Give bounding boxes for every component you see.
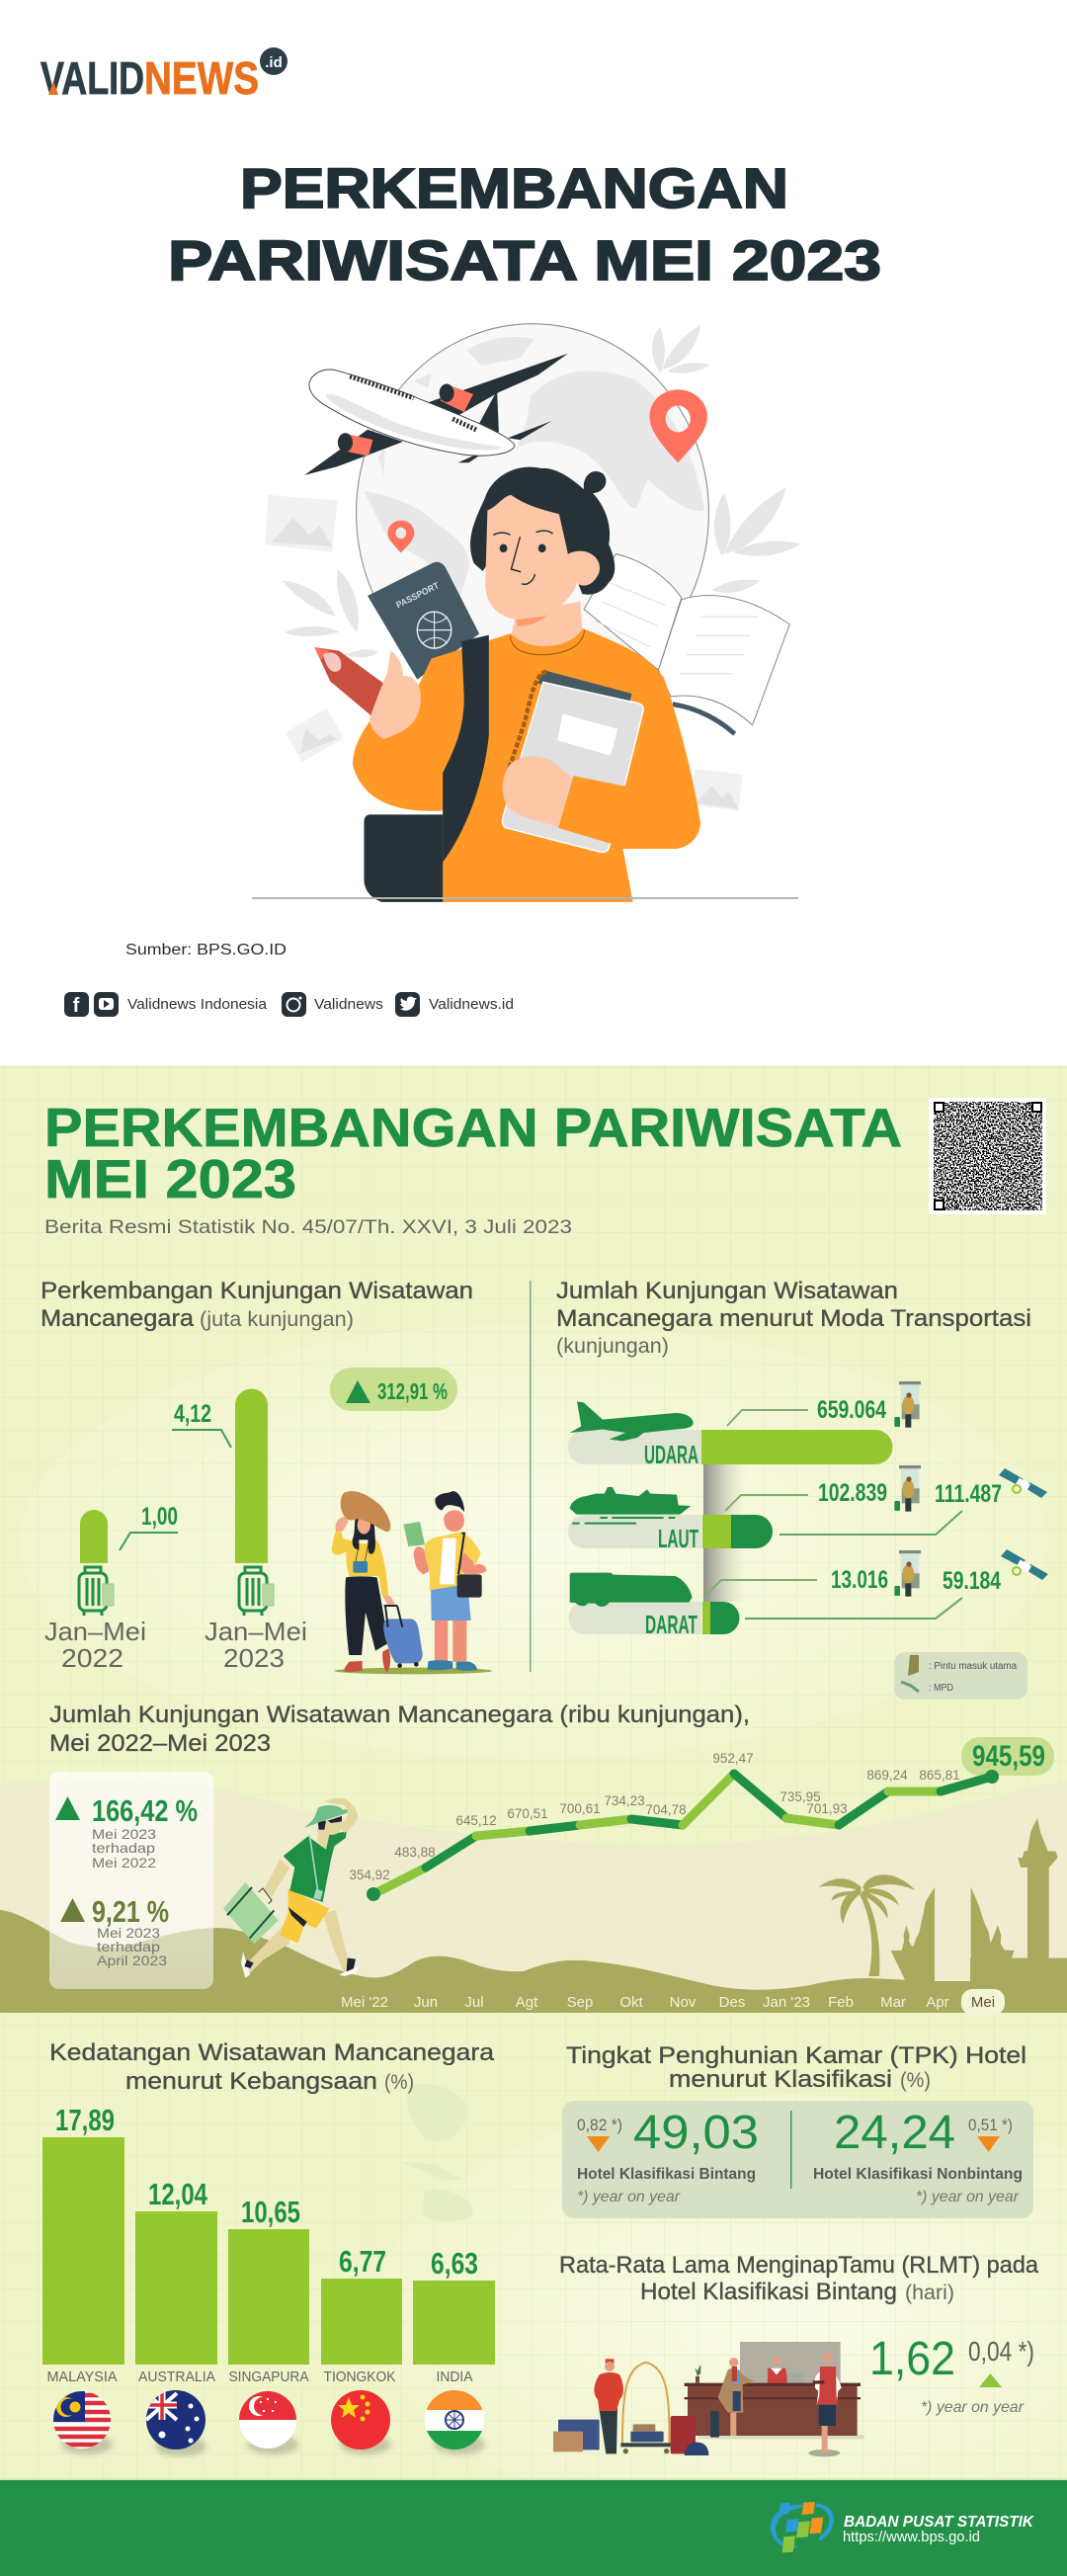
- month axis pill: [961, 1989, 1005, 2015]
- heading: Mei 2022–Mei 2023: [49, 1730, 271, 1757]
- bar values: [55, 2103, 478, 2281]
- legend: : Pintu masuk utama: [929, 1661, 1017, 1672]
- person body in orange shirt: [353, 628, 700, 902]
- label: UDARA: [644, 1440, 698, 1469]
- heading: (juta kunjungan): [200, 1308, 354, 1331]
- logo: Validnews: [41, 47, 287, 104]
- icon: satellite: [1001, 1549, 1048, 1580]
- hiker shorts: [280, 1889, 329, 1944]
- country names: SINGAPURA: [229, 2368, 308, 2385]
- label: Jan-Mei 2023: 2023: [223, 1643, 285, 1673]
- star hotels value: 49,03: [633, 2107, 759, 2159]
- woman: [332, 1491, 395, 1673]
- BPS logo: [771, 2502, 834, 2552]
- icon: faint picture frames: [265, 495, 743, 810]
- data labels: 952,47: [712, 1751, 754, 1766]
- flag: Singapore: [239, 2391, 296, 2449]
- infographic title: PERKEMBANGAN PARIWISATA: [44, 1097, 902, 1158]
- bellboy: [594, 2359, 623, 2453]
- month axis labels: Apr: [926, 1994, 949, 2011]
- bar values: 12,04: [148, 2177, 208, 2211]
- heading: (hari): [905, 2282, 954, 2304]
- icon: backpack: [364, 814, 446, 902]
- hiker suitcase: [223, 1882, 279, 1944]
- footer band: [0, 2478, 1067, 2576]
- heading: [49, 2039, 495, 2095]
- non-star hotels value: *) year on year: [916, 2189, 1020, 2205]
- country names: [47, 2368, 472, 2385]
- heading: (kunjungan): [556, 1335, 669, 1358]
- stat: month on month: Mei 2023: [97, 1925, 160, 1941]
- star hotels value: *) year on year: [577, 2189, 681, 2205]
- person shirt collar: [510, 630, 585, 655]
- country names: TIONGKOK: [324, 2368, 395, 2385]
- month axis labels: Mei '22: [341, 1994, 388, 2011]
- non-star hotels value: 0,51 *): [968, 2116, 1013, 2134]
- heading: [49, 1702, 750, 1757]
- stat: year on year: Mei 2022: [92, 1855, 156, 1870]
- agency name: BADAN PUSAT STATISTIK: [844, 2514, 1035, 2531]
- logo: Validnews: VALID: [41, 52, 144, 104]
- icon: globe: [357, 324, 708, 702]
- icon: ship silhouette: [570, 1487, 691, 1525]
- month axis labels: Mei: [971, 1994, 995, 2011]
- label pill: [567, 1430, 701, 1464]
- non-star hotels value: 24,24: [834, 2107, 955, 2159]
- desk: [685, 2365, 861, 2436]
- icon: suitcase 2023: [239, 1567, 274, 1616]
- bar shadow: [703, 1464, 749, 1602]
- bar values: 17,89: [55, 2103, 115, 2137]
- stat: year on year: [55, 1793, 198, 1870]
- star hotels value: 0,82 *): [577, 2116, 622, 2134]
- icon: youtube: [94, 992, 119, 1017]
- icon: small map pin: [388, 521, 414, 552]
- icon: pencil: [314, 647, 383, 715]
- data labels: 645,12: [455, 1813, 497, 1828]
- footnote: *) year on year: [921, 2399, 1025, 2416]
- section: white cover background: [0, 0, 1067, 1065]
- value main entry: 659.064: [817, 1396, 886, 1424]
- bar main entry: [702, 1515, 731, 1548]
- non-star hotels value: [813, 2107, 1023, 2205]
- heading: (%): [384, 2071, 414, 2094]
- icon: passport: PASSPORT: [394, 580, 441, 611]
- hiker head and hat: [318, 1820, 343, 1850]
- value MPD: 59.184: [943, 1567, 1001, 1595]
- data labels: 734,23: [604, 1793, 645, 1808]
- month axis labels: Nov: [670, 1994, 697, 2011]
- flag: India: [425, 2390, 484, 2450]
- heading: Mancanegara menurut Moda Transportasi: [556, 1305, 1031, 1332]
- value MPD: 111.487: [935, 1480, 1002, 1508]
- QR code: [929, 1098, 1046, 1214]
- subtitle: Berita Resmi Statistik No. 45/07/Th. XXVI, 3 Juli 2023: [44, 1216, 572, 1238]
- cover title: PARIWISATA MEI 2023: [168, 229, 881, 292]
- icon: facebook: f: [73, 995, 80, 1017]
- bar values: 10,65: [241, 2195, 300, 2229]
- icon: airplane: [304, 354, 568, 475]
- illustration: hotel reception: [553, 2342, 864, 2456]
- stats box: [49, 1772, 213, 1989]
- background hill: olive ground: [0, 1910, 1067, 2013]
- legend: : MPD: [929, 1683, 953, 1694]
- heading: (%): [900, 2069, 931, 2092]
- social media row: [64, 992, 514, 1017]
- value 1,00: [120, 1503, 178, 1550]
- reception shadow: [698, 2435, 864, 2439]
- country names: AUSTRALIA: [138, 2368, 215, 2385]
- heading: menurut Klasifikasi: [669, 2066, 892, 2093]
- month axis labels: Feb: [828, 1994, 854, 2011]
- month axis labels: Jun: [414, 1994, 438, 2011]
- data labels: 704,78: [645, 1802, 687, 1817]
- cover title: [168, 157, 881, 292]
- value 1,00: 1,00: [141, 1503, 178, 1531]
- bar 2022: [80, 1510, 108, 1563]
- vertical divider: [530, 1281, 532, 1672]
- logo: Validnews: .id: [265, 54, 283, 71]
- background hill: beige: [0, 1781, 1067, 2013]
- month axis labels: Mar: [880, 1994, 906, 2011]
- heading: [559, 2252, 1039, 2305]
- data labels: 354,92: [349, 1868, 390, 1882]
- panel: monthly visitors line chart: [0, 1702, 1067, 2015]
- occupancy card: [562, 2101, 1033, 2218]
- heading: Rata-Rata Lama MenginapTamu (RLMT) pada: [559, 2252, 1039, 2279]
- data labels: 670,51: [507, 1806, 548, 1821]
- label: Jan-Mei 2022: 2022: [61, 1643, 123, 1673]
- faint world map: [401, 2084, 473, 2222]
- icon: entry gate: [894, 1465, 921, 1512]
- icon: backpack strap: [443, 635, 489, 862]
- bars: [42, 2137, 495, 2365]
- month axis labels: [341, 1994, 995, 2011]
- heading: Hotel Klasifikasi Bintang: [640, 2279, 897, 2305]
- panel: hotel room occupancy: [562, 2042, 1033, 2218]
- heading: [41, 1278, 473, 1332]
- icon: notebook: [503, 670, 643, 852]
- icon: instagram: [282, 992, 306, 1017]
- label: Jan-Mei 2023: Jan–Mei: [205, 1617, 307, 1646]
- data labels: 865,81: [919, 1768, 960, 1783]
- icon: entry gate: [894, 1550, 921, 1597]
- logo: Validnews: NEWS: [144, 52, 259, 104]
- silhouette: left gate: [891, 1887, 935, 1981]
- panel: foreign visitor development: [41, 1278, 492, 1674]
- value main entry: 102.839: [818, 1479, 887, 1507]
- infographic title: MEI 2023: [44, 1148, 296, 1209]
- bar 2023: [235, 1389, 268, 1563]
- silhouette: palm tree: [818, 1874, 916, 1976]
- heading: [556, 1278, 1031, 1358]
- heading: Jumlah Kunjungan Wisatawan Mancanegara (ribu kunjungan),: [49, 1702, 750, 1728]
- person head with hair: [470, 467, 615, 646]
- suitcase: [383, 1606, 423, 1668]
- month axis labels: Jan '23: [763, 1994, 810, 2011]
- flag shadows: [61, 2435, 485, 2456]
- country names: INDIA: [437, 2368, 472, 2385]
- data labels: 869,24: [866, 1768, 908, 1783]
- section: green infographic background: [0, 1065, 1067, 2530]
- flag: Australia: [146, 2390, 205, 2450]
- hiker back arm: [264, 1860, 289, 1897]
- value MPD: [780, 1480, 1002, 1535]
- stat: year on year: terhadap: [92, 1840, 155, 1856]
- stat: year on year: Mei 2023: [92, 1826, 156, 1842]
- highlighted value 945,59: [961, 1737, 1054, 1776]
- handle: Validnews.id: Validnews.id: [429, 997, 514, 1013]
- receptionist: [768, 2357, 803, 2384]
- stat: month on month: [60, 1894, 169, 1968]
- month axis labels: Agt: [516, 1994, 538, 2011]
- bar: [701, 1430, 893, 1464]
- heading: menurut Kebangsaan: [125, 2068, 377, 2095]
- country names: MALAYSIA: [47, 2368, 117, 2385]
- luggage cart: [620, 2363, 671, 2453]
- ground line: [252, 897, 798, 899]
- man: [403, 1491, 486, 1671]
- label pill: [569, 1602, 701, 1634]
- handle: Validnews Indonesia: Validnews Indonesia: [127, 997, 268, 1013]
- illustration: two tourists with luggage: [332, 1491, 492, 1674]
- heading: [566, 2042, 1026, 2093]
- stat: month on month: terhadap: [97, 1939, 160, 1954]
- icon: leaves: [283, 324, 800, 657]
- star hotels value: [577, 2107, 759, 2205]
- heading: Jumlah Kunjungan Wisatawan: [556, 1278, 898, 1304]
- bar values: 6,77: [339, 2244, 386, 2279]
- cover title: PERKEMBANGAN: [240, 157, 788, 220]
- bar MPD: [710, 1602, 739, 1634]
- person hand thumbs up: [369, 651, 421, 739]
- stat: month on month: 9,21 %: [92, 1894, 169, 1929]
- data labels: [349, 1751, 960, 1882]
- icon: twitter: [395, 992, 420, 1017]
- icon: satellite: [999, 1468, 1047, 1498]
- percent change badge: [330, 1368, 457, 1411]
- row: land transport: [569, 1549, 1048, 1639]
- non-star hotels value: Hotel Klasifikasi Nonbintang: [813, 2166, 1023, 2183]
- value main entry: [704, 1566, 888, 1597]
- icon: bus silhouette: [570, 1573, 693, 1607]
- bar MPD: [731, 1515, 773, 1548]
- month axis labels: Sep: [567, 1994, 593, 2011]
- source text: Sumber: BPS.GO.ID: [125, 942, 287, 958]
- label: Jan-Mei 2023: [205, 1617, 307, 1673]
- receptionist standing: [808, 2353, 842, 2456]
- icon: passport: [368, 562, 479, 680]
- heading: Mancanegara: [41, 1305, 195, 1332]
- flag: China: [331, 2390, 390, 2450]
- percent change badge: 312,91 %: [377, 1378, 448, 1404]
- bar values: 6,63: [431, 2246, 478, 2281]
- star hotels value: Hotel Klasifikasi Bintang: [577, 2166, 756, 2183]
- illustration: hiker with suitcase: [223, 1798, 359, 1978]
- label: Jan-Mei 2022: Jan–Mei: [44, 1617, 146, 1646]
- silhouette: landmarks: [818, 1818, 1067, 2013]
- panel: arrivals by nationality: [42, 2039, 495, 2456]
- stat: month on month: April 2023: [97, 1953, 167, 1968]
- silhouette: right gate and national monument: [948, 1818, 1067, 2013]
- heading: Perkembangan Kunjungan Wisatawan: [41, 1278, 473, 1304]
- label pill: [568, 1515, 701, 1548]
- icon: open book: [584, 554, 789, 734]
- hiker legs: [244, 1910, 351, 1973]
- key rack: [740, 2342, 841, 2384]
- data labels: 701,93: [806, 1801, 848, 1816]
- value main entry: 13.016: [831, 1566, 888, 1594]
- value main entry: [725, 1479, 887, 1511]
- hiker shirt: [284, 1831, 347, 1902]
- infographic title: [44, 1097, 902, 1209]
- line chart: [367, 1770, 999, 1901]
- agency website: https://www.bps.go.id: [843, 2529, 980, 2545]
- icon: entry gate: [894, 1381, 921, 1428]
- label: LAUT: [658, 1524, 698, 1553]
- illustration: traveller with passport, plane and globe: [265, 324, 800, 902]
- suitcases: [553, 2416, 708, 2455]
- panel: transport mode: [556, 1278, 1048, 1700]
- change 0,04: [968, 2336, 1034, 2387]
- icon: airplane silhouette: [570, 1401, 694, 1441]
- value 1,62: 1,62: [869, 2333, 955, 2385]
- value main entry: [727, 1396, 886, 1426]
- label: Jan-Mei 2022: [44, 1617, 146, 1673]
- stat: year on year: 166,42 %: [92, 1793, 198, 1828]
- handle: Validnews: Validnews: [314, 997, 383, 1013]
- data labels: 483,88: [394, 1845, 436, 1860]
- guest: [710, 2358, 754, 2438]
- month axis labels: Jul: [464, 1994, 484, 2011]
- heading: Tingkat Penghunian Kamar (TPK) Hotel: [566, 2042, 1026, 2069]
- highlighted value 945,59: 945,59: [972, 1740, 1045, 1773]
- panel: average length of stay: [553, 2252, 1039, 2456]
- label: DARAT: [645, 1610, 698, 1639]
- icon: large map pin: [649, 389, 707, 462]
- heading: Kedatangan Wisatawan Mancanegara: [49, 2039, 495, 2066]
- person holding arm: [503, 756, 700, 849]
- row: air transport: [567, 1381, 921, 1469]
- value MPD: [745, 1567, 1001, 1619]
- month axis labels: Des: [719, 1994, 745, 2011]
- data labels: 700,61: [559, 1801, 601, 1816]
- row: sea transport: [568, 1465, 1047, 1553]
- bar main entry: [702, 1602, 710, 1634]
- flag: Malaysia: [53, 2391, 111, 2449]
- icon: suitcase 2022: [79, 1567, 114, 1616]
- change 0,04: 0,04 *): [968, 2336, 1034, 2367]
- value 4,12: [172, 1400, 231, 1448]
- value 4,12: 4,12: [174, 1400, 211, 1428]
- month axis labels: Okt: [619, 1994, 643, 2011]
- data labels: 735,95: [780, 1789, 821, 1804]
- icon: facebook: [64, 992, 89, 1017]
- legend: [894, 1652, 1027, 1700]
